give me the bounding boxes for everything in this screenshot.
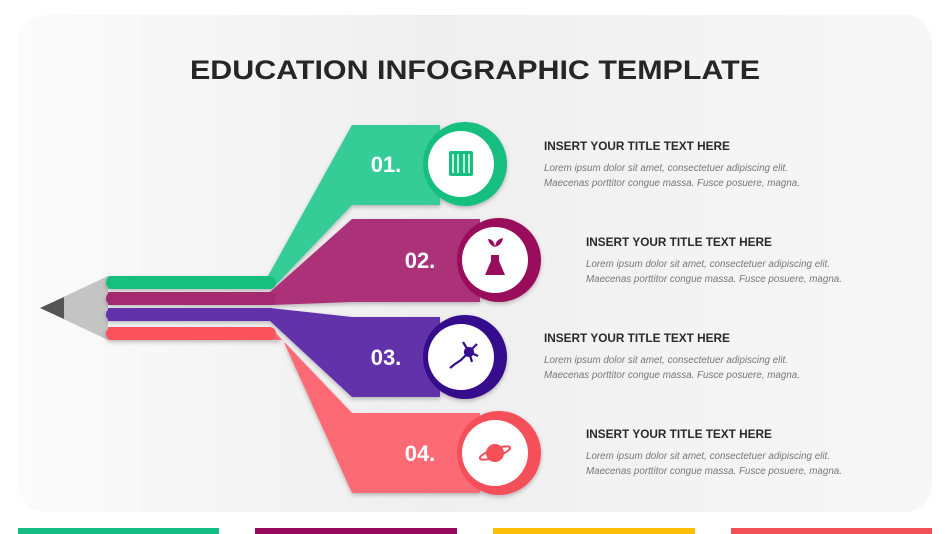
text block 1: Lorem ipsum dolor sit amet, consectetuer adipiscing elit.	[544, 163, 788, 174]
icon: pencil tip	[40, 276, 108, 340]
text block 1	[544, 139, 800, 189]
text block 1: Maecenas porttitor congue massa. Fusce posuere, magna.	[544, 178, 800, 189]
branch 02 magenta	[106, 218, 541, 305]
text block 3	[544, 331, 800, 381]
text block 4: INSERT YOUR TITLE TEXT HERE	[586, 427, 772, 441]
bottom colour bars	[18, 528, 932, 534]
number 04: 04.	[405, 441, 435, 466]
branch 01 green	[106, 122, 507, 289]
branch 04 red	[106, 327, 541, 495]
number 02: 02.	[405, 248, 435, 273]
number 03: 03.	[371, 345, 401, 370]
text block 2: INSERT YOUR TITLE TEXT HERE	[586, 235, 772, 249]
icon: abacus	[449, 151, 473, 176]
icon: neuron	[450, 342, 478, 368]
text block 3: INSERT YOUR TITLE TEXT HERE	[544, 331, 730, 345]
text block 3: Maecenas porttitor congue massa. Fusce posuere, magna.	[544, 370, 800, 381]
title: EDUCATION INFOGRAPHIC TEMPLATE	[190, 55, 760, 85]
text block 3: Lorem ipsum dolor sit amet, consectetuer adipiscing elit.	[544, 355, 788, 366]
branch 03 purple	[106, 308, 507, 399]
text block 2: Lorem ipsum dolor sit amet, consectetuer adipiscing elit.	[586, 259, 830, 270]
text block 2: Maecenas porttitor congue massa. Fusce posuere, magna.	[586, 274, 842, 285]
text block 4	[586, 427, 842, 477]
text block 1: INSERT YOUR TITLE TEXT HERE	[544, 139, 730, 153]
text block 4: Lorem ipsum dolor sit amet, consectetuer adipiscing elit.	[586, 451, 830, 462]
text block 2	[586, 235, 842, 285]
number 01: 01.	[371, 152, 401, 177]
icon: planet	[479, 444, 511, 462]
icon: flask with sprout	[485, 238, 505, 275]
text block 4: Maecenas porttitor congue massa. Fusce posuere, magna.	[586, 466, 842, 477]
